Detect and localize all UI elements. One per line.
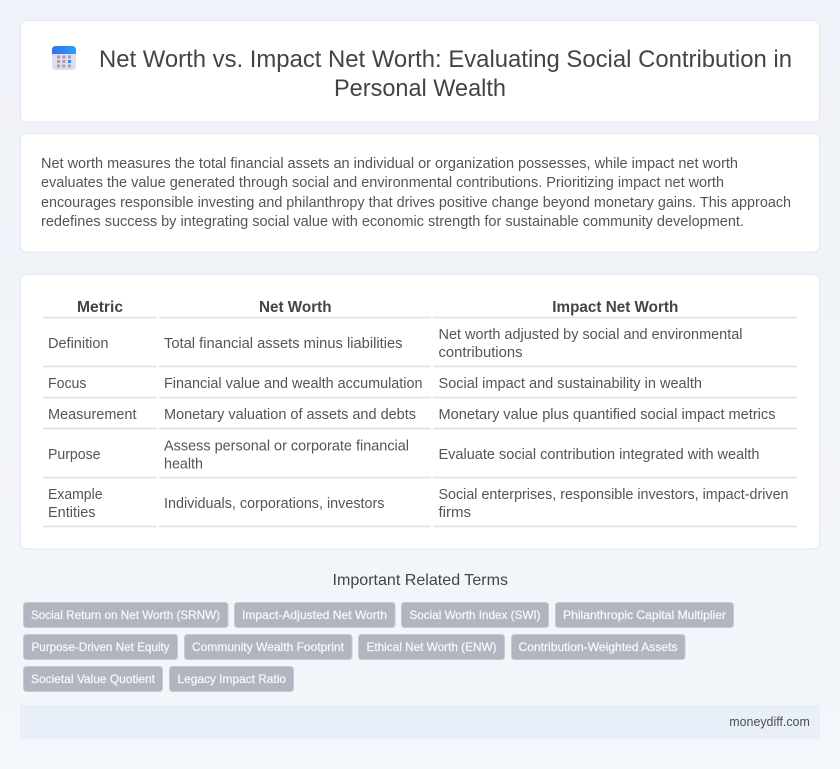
text block: summary: Net worth measures the total financial assets an individual or organization possesses, while impact net worth <box>41 156 738 172</box>
text block: summary: redefines success by integrating social value with economic strength for sustainable community development. <box>41 214 744 230</box>
table row: measurement <box>43 407 797 428</box>
panel: summary paragraph <box>20 134 820 252</box>
tag: societal value: Societal Value Quotient <box>31 672 156 686</box>
footer bar <box>20 705 820 739</box>
panel: comparison table <box>20 274 820 549</box>
table row: example entities: Social enterprises, responsible investors, impact-driven <box>438 487 788 503</box>
tag: SWI <box>402 602 548 628</box>
tag: SRNW: Social Return on Net Worth (SRNW) <box>31 608 220 622</box>
table header row: Metric <box>77 299 123 316</box>
heading: important related terms: Important Related Terms <box>332 572 508 589</box>
table row: example entities: Individuals, corporations, investors <box>164 496 384 512</box>
tag: contribution-weighted: Contribution-Weighted Assets <box>518 640 678 654</box>
icon: calendar <box>52 46 76 70</box>
tag: societal value <box>24 666 162 692</box>
table row: focus <box>43 376 797 398</box>
tag: legacy impact <box>170 666 294 692</box>
table row: focus: Financial value and wealth accumulation <box>164 376 422 392</box>
tag: community: Community Wealth Footprint <box>192 640 345 654</box>
table header row: Net Worth <box>259 299 332 316</box>
table row: focus: Focus <box>48 376 86 392</box>
table header row <box>43 299 797 318</box>
tag: legacy impact: Legacy Impact Ratio <box>178 672 286 686</box>
tag: philanthropic <box>556 602 734 628</box>
table row: example entities: Example <box>48 487 102 503</box>
tag: purpose-driven: Purpose-Driven Net Equity <box>32 640 170 654</box>
tag: community <box>184 634 352 660</box>
table row: purpose: Assess personal or corporate financial <box>164 438 409 454</box>
table row: definition: Net worth adjusted by social and environmental <box>438 327 742 343</box>
table row: purpose: Purpose <box>48 447 100 463</box>
table row: focus: Social impact and sustainability in wealth <box>438 376 702 392</box>
table row: measurement: Monetary valuation of assets and debts <box>164 407 416 423</box>
title <box>99 46 792 102</box>
tag: SWI: Social Worth Index (SWI) <box>410 608 541 622</box>
table row: definition: contributions <box>438 345 522 361</box>
text block: summary: encourages responsible investing and philanthropy that drives positive change beyond monetary gains. This approach <box>41 195 791 211</box>
table header row: Impact Net Worth <box>552 299 678 316</box>
table row: measurement: Measurement <box>48 407 136 423</box>
panel: title header <box>20 20 820 122</box>
title: Net Worth vs. Impact Net Worth: Evaluating Social Contribution in <box>99 46 792 73</box>
table row: purpose: health <box>164 456 203 472</box>
text block: summary: evaluates the value generated through social and environmental contributions. Prioritizing impact net worth <box>41 175 724 191</box>
table row: purpose: Evaluate social contribution integrated with wealth <box>438 447 760 463</box>
tag: philanthropic: Philanthropic Capital Multiplier <box>563 608 726 622</box>
tag: impact-adjusted <box>234 602 395 628</box>
related term tags <box>24 602 734 692</box>
tag: purpose-driven <box>24 634 178 660</box>
tag: ENW: Ethical Net Worth (ENW) <box>366 640 497 654</box>
table row: example entities <box>43 487 797 526</box>
tag: contribution-weighted <box>512 634 685 660</box>
table row: definition <box>43 327 797 366</box>
table row: definition: Total financial assets minus liabilities <box>164 336 402 352</box>
footer source text: moneydiff.com <box>729 715 810 729</box>
tag: impact-adjusted: Impact-Adjusted Net Worth <box>242 608 387 622</box>
text block: summary <box>41 156 791 230</box>
table row: example entities: firms <box>438 505 471 521</box>
tag: SRNW <box>24 602 228 628</box>
title: Personal Wealth <box>334 75 506 102</box>
table row: definition: Definition <box>48 336 108 352</box>
tag: ENW <box>358 634 504 660</box>
table row: purpose <box>43 438 797 478</box>
table row: measurement: Monetary value plus quantified social impact metrics <box>438 407 776 423</box>
table row: example entities: Entities <box>48 505 96 521</box>
